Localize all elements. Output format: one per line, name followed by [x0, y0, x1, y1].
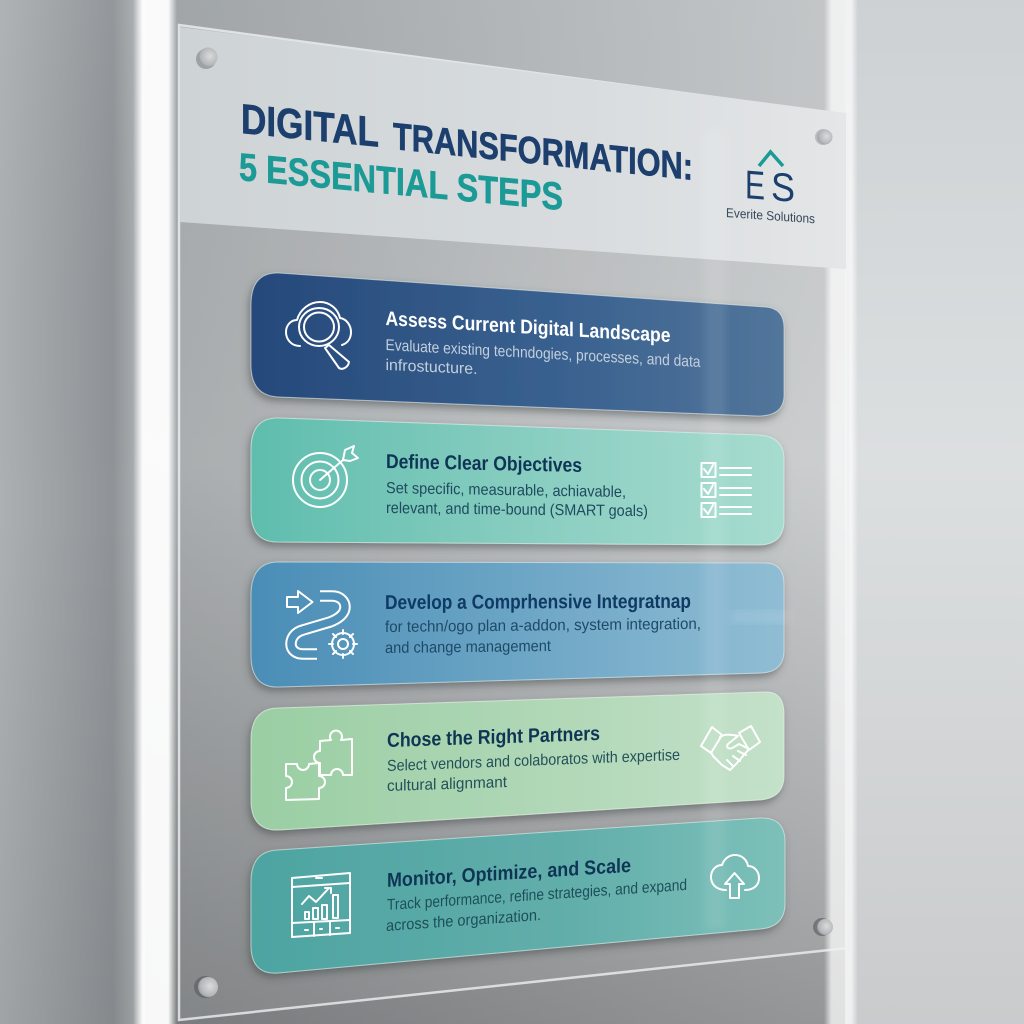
step 2 title: Define Clear Objectives — [386, 451, 582, 477]
step 1 description: Evaluate existing techndogies, processes, and data — [386, 337, 701, 371]
step 4 description — [387, 747, 680, 795]
panel: step 1 assess — [251, 273, 784, 416]
left light strip — [133, 0, 177, 1024]
title: 5 ESSENTIAL STEPS — [239, 146, 563, 219]
window reflection — [730, 610, 790, 624]
step 3 title: Develop a Comprhensive Integratnap — [385, 591, 691, 614]
icon: route with gear — [287, 591, 357, 658]
frosted header band — [180, 27, 846, 269]
panel: step 2 objectives — [251, 418, 784, 545]
acrylic panel — [179, 25, 848, 1020]
step 3 description: and change management — [385, 638, 552, 657]
step 5 description — [386, 877, 687, 935]
step 5 title: Monitor, Optimize, and Scale — [387, 855, 631, 892]
step 4 description: Select vendors and colaboratos with expertise — [387, 747, 680, 775]
logo: Everite Solutions: Everite Solutions — [726, 205, 815, 226]
panel: step 3 integration — [251, 562, 784, 687]
logo: Everite Solutions — [726, 152, 815, 226]
icon: checklist — [702, 463, 751, 517]
icon: cloud magnifier — [286, 302, 351, 369]
step 3 description — [385, 616, 701, 657]
title: DIGITAL — [241, 95, 379, 156]
icon: dashboard chart — [292, 873, 350, 937]
mounting bolts — [194, 48, 833, 998]
step 4 title: Chose the Right Partners — [387, 723, 600, 752]
step 5 description: Track performance, refine strategies, and expand — [387, 877, 687, 914]
icon: target with arrow — [293, 446, 358, 507]
step 2 description: relevant, and time-bound (SMART goals) — [386, 500, 648, 520]
step 3 description: for techn/ogo plan a-addon, system integration, — [385, 616, 701, 636]
panel: step 5 monitor — [251, 818, 785, 973]
right light strip — [824, 0, 858, 1024]
title: TRANSFORMATION: — [393, 116, 693, 189]
step 5 description: across the organization. — [386, 907, 541, 935]
step 2 description: Set specific, measurable, achiavable, — [386, 480, 626, 501]
vertical glass reflection — [704, 130, 726, 930]
icon: handshake — [701, 726, 760, 770]
step 2 description — [386, 480, 648, 520]
logo: Everite Solutions: E — [745, 163, 765, 209]
title — [239, 95, 693, 219]
logo: Everite Solutions: S — [771, 165, 795, 211]
icon: puzzle pieces — [286, 731, 352, 800]
step 1 title: Assess Current Digital Landscape — [386, 308, 670, 347]
step 4 description: cultural alignmant — [387, 774, 508, 795]
panel: step 4 partners — [251, 692, 784, 830]
icon: cloud upload — [711, 855, 759, 898]
step 1 description: infrostucture. — [386, 357, 478, 378]
